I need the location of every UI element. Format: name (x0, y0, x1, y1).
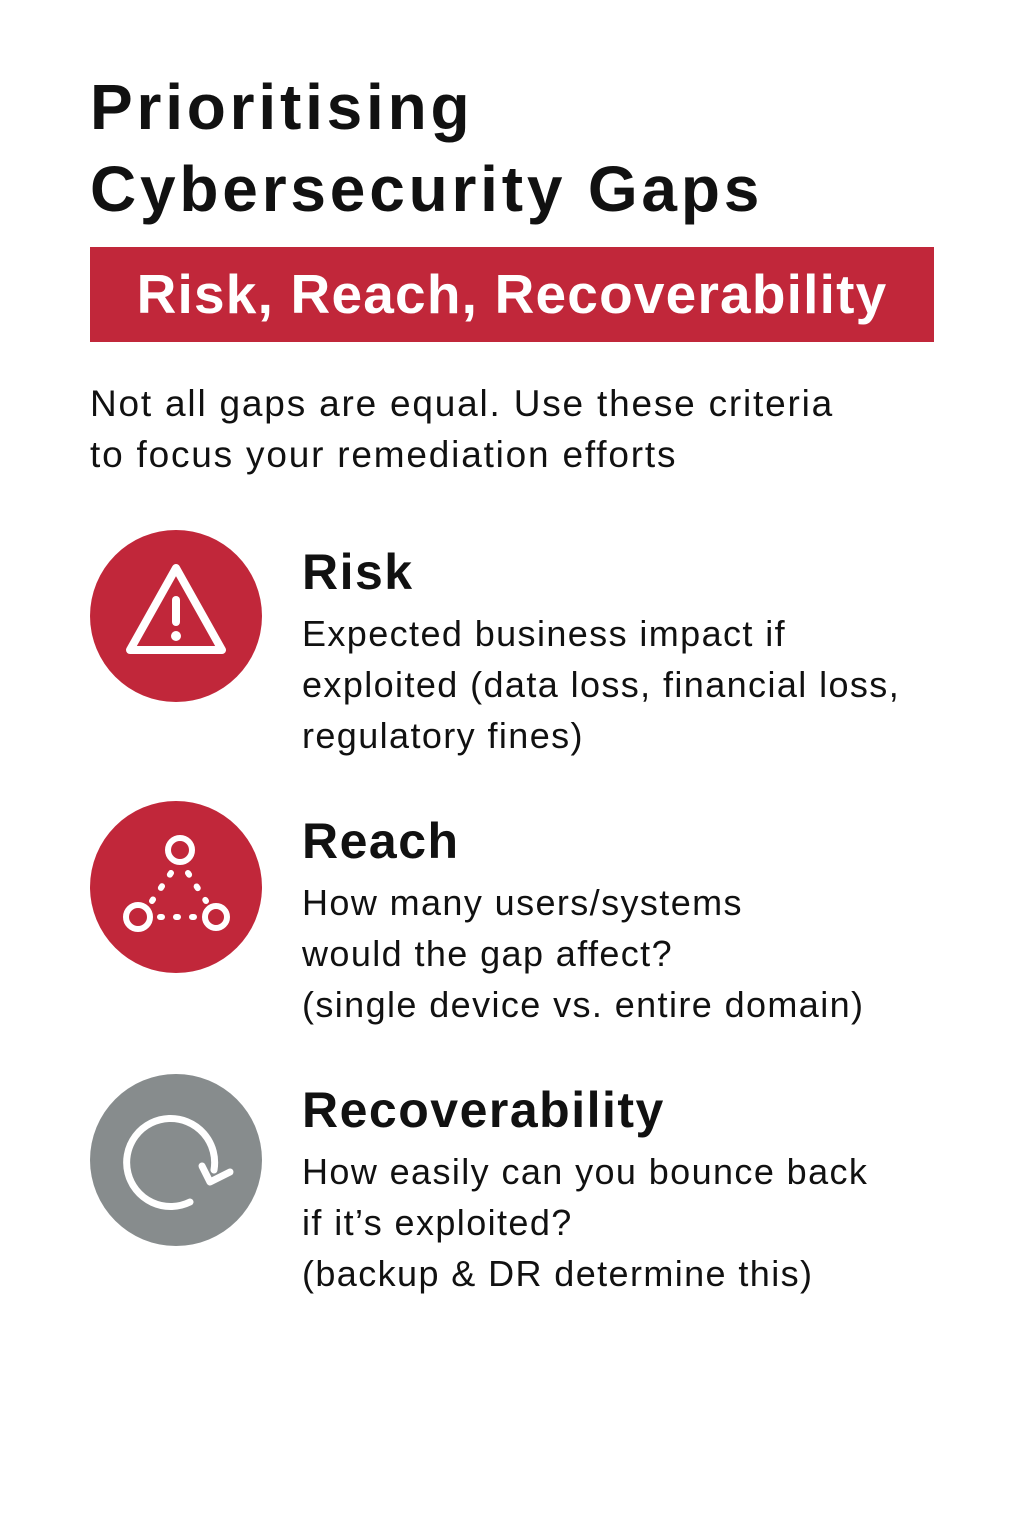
heading: recoverability: Recoverability (302, 1082, 665, 1138)
heading: reach: Reach (302, 813, 460, 869)
heading: risk: Risk (302, 544, 414, 600)
icon: warning (90, 530, 262, 702)
text: reach (302, 882, 864, 1025)
icon: recovery arrow (90, 1074, 262, 1246)
text: risk: Expected business impact if (302, 613, 786, 654)
title: Cybersecurity Gaps (90, 153, 763, 225)
text: reach: (single device vs. entire domain) (302, 984, 864, 1025)
text: recoverability: How easily can you bounce back (302, 1151, 868, 1192)
section: recoverability (302, 1082, 868, 1294)
text: risk: exploited (data loss, financial loss, (302, 664, 900, 705)
text: recoverability: (backup & DR determine this) (302, 1253, 813, 1294)
icon: network (90, 801, 262, 973)
text: recoverability (302, 1151, 868, 1294)
text: risk: regulatory fines) (302, 715, 584, 756)
section: reach (302, 813, 864, 1025)
intro text: to focus your remediation efforts (90, 434, 677, 475)
text: recoverability: if it’s exploited? (302, 1202, 573, 1243)
text: reach: would the gap affect? (302, 933, 673, 974)
banner: subtitle: Risk, Reach, Recoverability (137, 263, 887, 325)
title (90, 71, 763, 225)
text: risk (302, 613, 900, 756)
text: reach: How many users/systems (302, 882, 743, 923)
intro text (90, 383, 834, 475)
section: risk (302, 544, 900, 756)
title: Prioritising (90, 71, 473, 143)
banner: subtitle (90, 247, 934, 342)
intro text: Not all gaps are equal. Use these criteria (90, 383, 834, 424)
